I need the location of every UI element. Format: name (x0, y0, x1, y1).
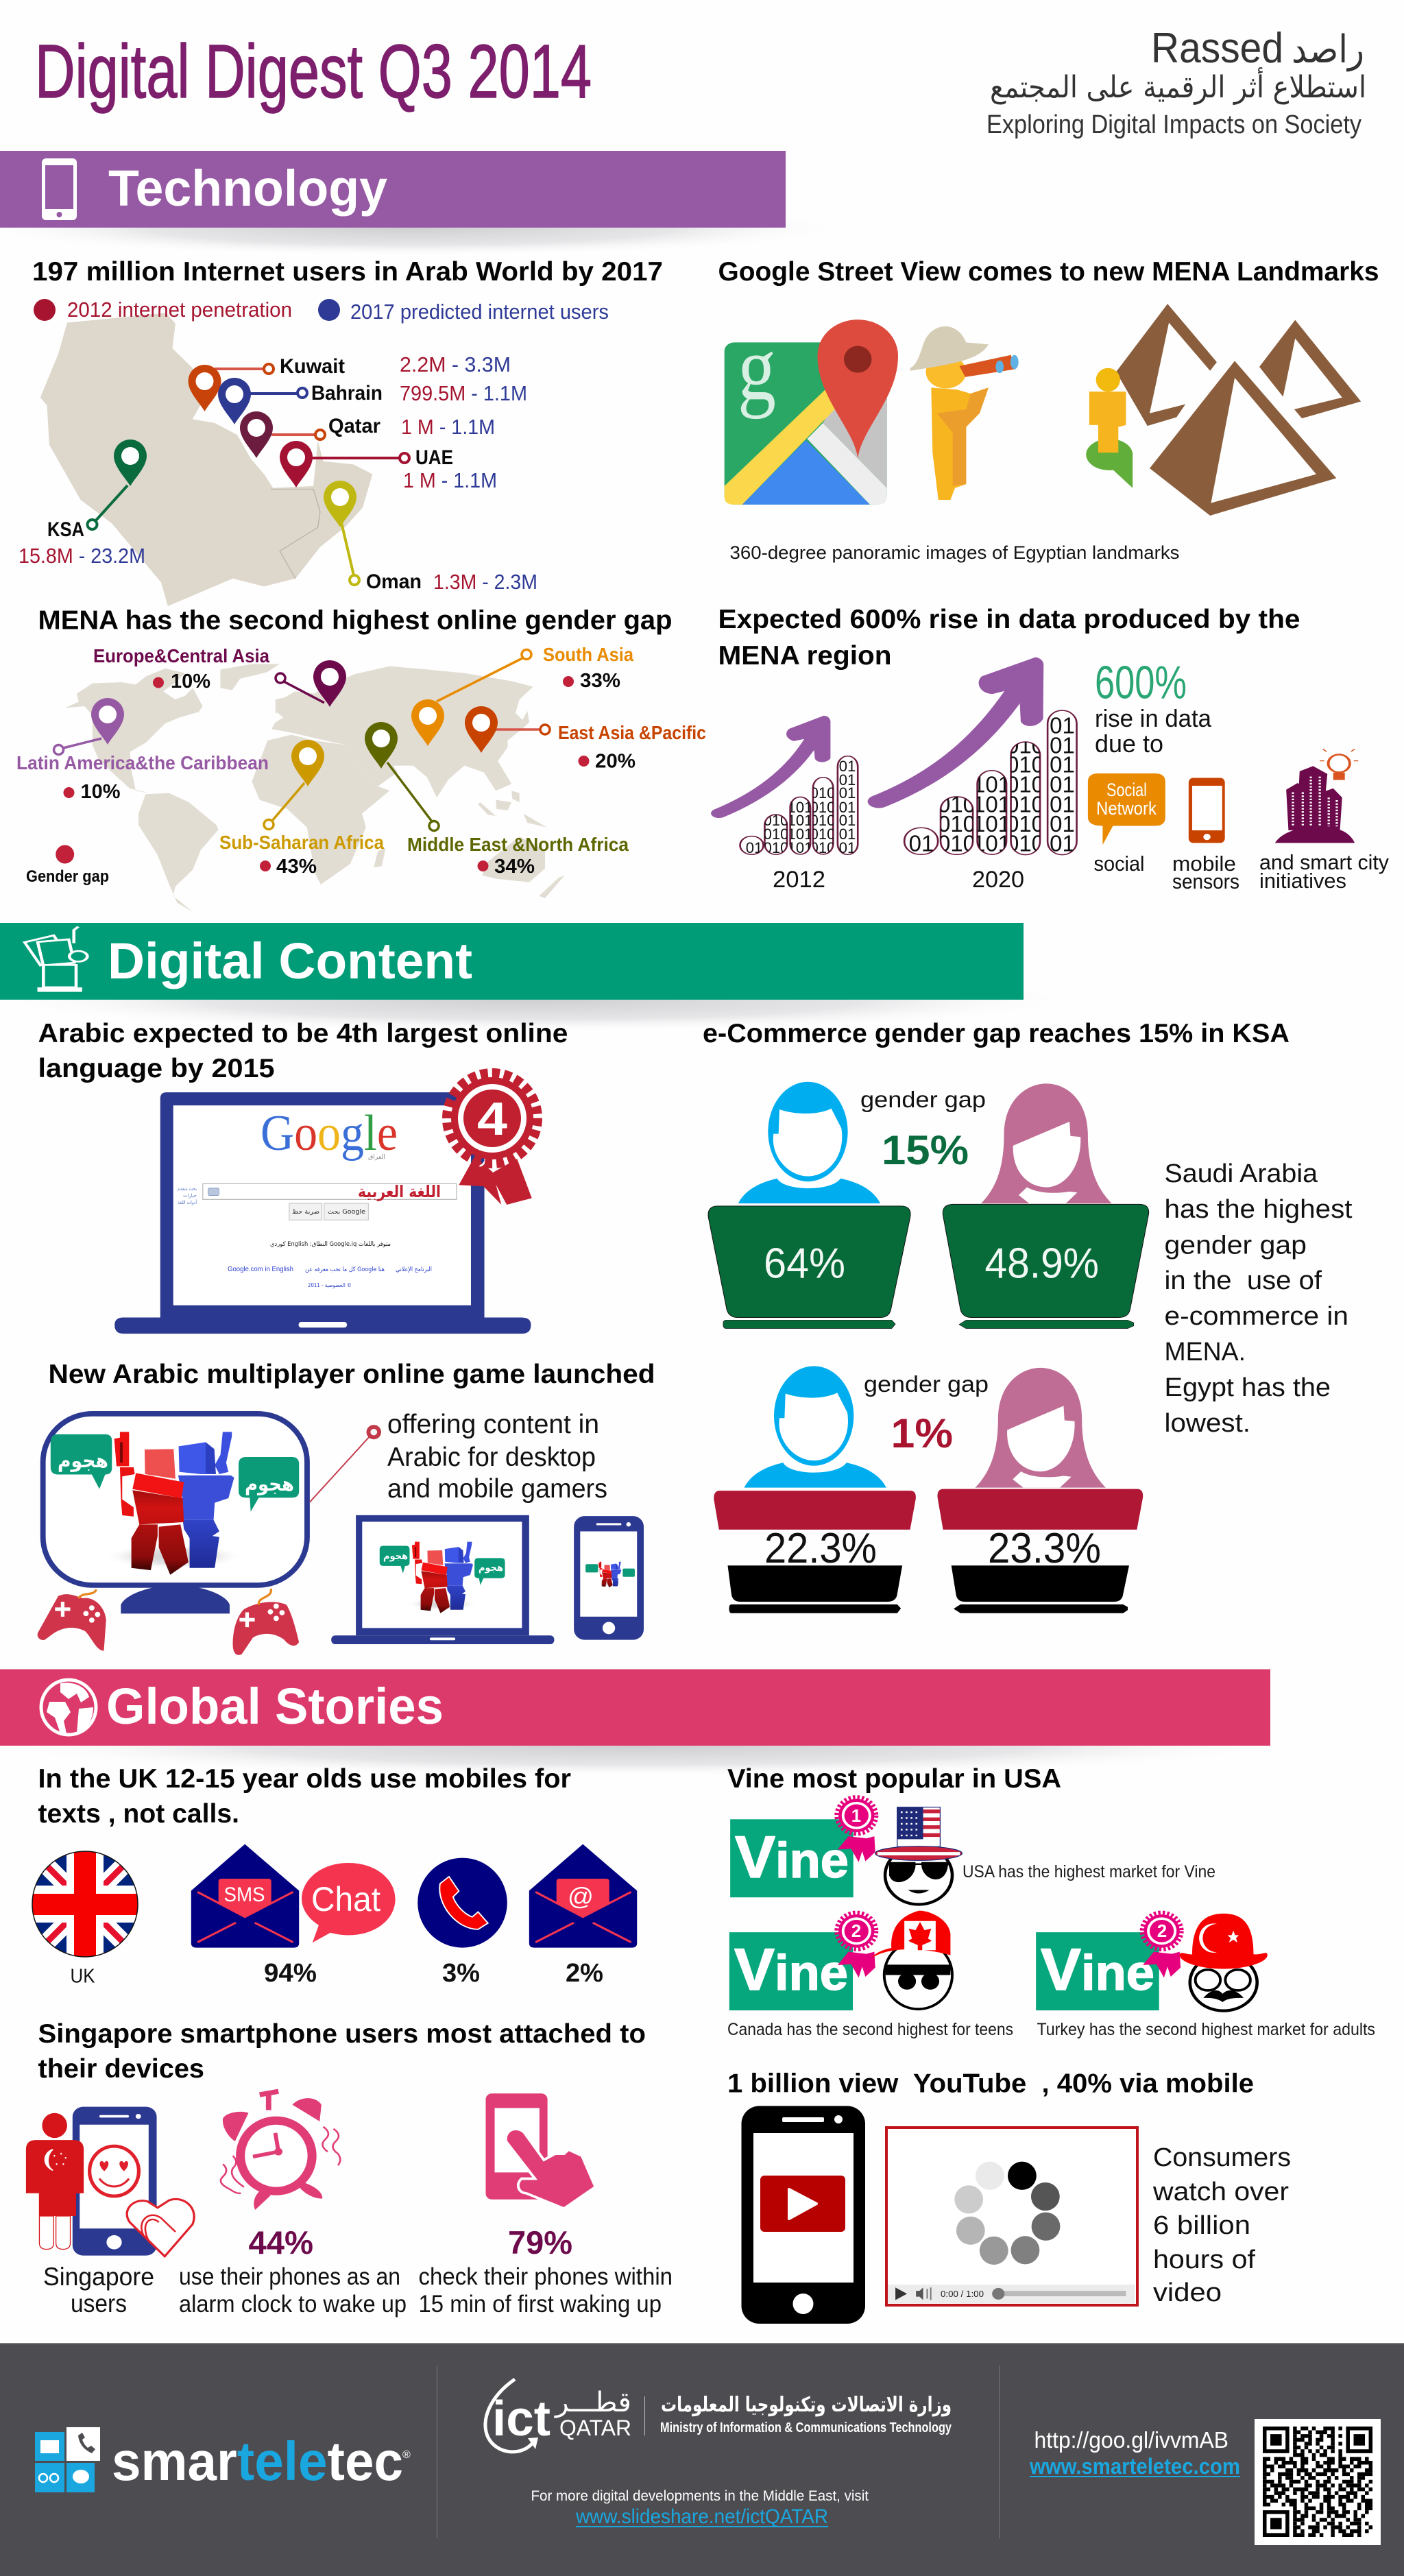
panel: 600% rise in data (718, 605, 1389, 893)
logo: smarteletec: smarteletec (112, 2431, 403, 2492)
icon labels: initiatives (1259, 869, 1346, 893)
badge: rank 4 (448, 1074, 537, 1205)
text: rise in data due to (1095, 704, 1212, 758)
country values: 799.5M - 1.1M (400, 381, 527, 405)
icon: SMS envelope and chat bubble (191, 1844, 396, 1948)
text: first waking stat: check their phones within (418, 2263, 673, 2290)
binary digits: 101 (788, 839, 812, 856)
percentages: 94% (264, 1959, 317, 1988)
link: goo.gl: http://goo.gl/ivvmAB (1034, 2427, 1228, 2453)
binary digits: 010 (1006, 791, 1044, 817)
icon: Singapore user with phone (26, 2107, 194, 2256)
heading: Singapore smartphone users most attached to (38, 2019, 646, 2049)
percentages (264, 1959, 603, 1988)
icon: alarm clock (221, 2091, 340, 2210)
side text: 6 billion (1153, 2211, 1250, 2240)
section banner: Digital Content (0, 923, 1083, 1033)
KSA users on laptops (708, 1082, 1149, 1329)
callout text (387, 1410, 607, 1504)
panel: Singapore smartphone users (26, 2019, 673, 2318)
icon labels (1094, 850, 1389, 893)
Egypt labels: 23.3% (988, 1525, 1101, 1572)
stat: 44%: 44% (248, 2224, 313, 2261)
heading: MENA has the second highest online gender gap (38, 606, 672, 635)
binary digits (746, 713, 1075, 856)
region values (63, 670, 636, 878)
Vine wordmarks: Vine (734, 1937, 848, 2003)
region labels: Latin America&the Caribbean (16, 752, 269, 773)
footer (0, 2343, 1404, 2576)
arrow: 2012 growth (719, 716, 831, 813)
text: first waking stat: 15 min of first waking up (418, 2291, 662, 2318)
heading: their devices (38, 2054, 204, 2084)
small laptop (331, 1515, 554, 1644)
country values (19, 352, 537, 594)
Google page text: الخصوصية - 2011 © (308, 1282, 352, 1288)
binary digits: 01 (839, 839, 856, 856)
text: alarm clock stat: alarm clock to wake up (179, 2291, 407, 2318)
side text: has the highest (1164, 1195, 1353, 1224)
binary digits: 010 (938, 811, 976, 836)
country labels: Bahrain (311, 382, 383, 405)
rank numbers: 2 (851, 1921, 861, 1941)
Google page text: اللغة العربية (358, 1182, 441, 1201)
KSA labels: 64% (764, 1240, 845, 1288)
title: Digital Digest Q3 2014 (35, 29, 592, 114)
heading (38, 1019, 568, 1083)
year labels: 2012 (773, 867, 825, 893)
QR code (1255, 2419, 1381, 2545)
binary digits: 01 (1050, 732, 1075, 758)
binary digits: 010 (810, 784, 835, 802)
Vine wordmarks: Vine (735, 1825, 849, 1890)
Google page text: أدوات اللغة (178, 1199, 197, 1205)
link: slideshare: www.slideshare.net/ictQATAR (575, 2505, 828, 2528)
Vine tiles (729, 1819, 1159, 2010)
year labels (773, 867, 1024, 893)
heading: 1 billion view YouTube , 40% via mobile (727, 2069, 1254, 2098)
binary digits: 01 (839, 812, 856, 829)
rank numbers: 1 (851, 1805, 861, 1826)
icon: SMS envelope and chat bubble: SMS (223, 1883, 265, 1906)
binary digits: 010 (1006, 751, 1044, 778)
heading (38, 2019, 646, 2084)
side text: Egypt has the (1164, 1373, 1331, 1402)
icon: globe (41, 1680, 96, 1735)
callout text: offering content in (387, 1410, 599, 1439)
binary digits: 01 (1050, 831, 1075, 856)
country values: 1 M - 1.1M (401, 415, 495, 439)
text: more developments: For more digital developments in the Middle East, visit (531, 2488, 869, 2504)
small bubble labels: هجوم (479, 1563, 503, 1574)
binary digits: 010 (938, 791, 976, 817)
Vine wordmarks (734, 1825, 1154, 2003)
panel: Internet users in Arab World (19, 257, 663, 606)
Egypt labels: gender gap (864, 1371, 989, 1397)
icon: mobile sensor phone (1189, 778, 1225, 843)
binary digits: 101 (973, 791, 1010, 817)
panel: Arabic 4th largest language (38, 1019, 568, 1334)
rank numbers: 2 (1157, 1921, 1167, 1941)
Egypt labels (764, 1371, 1101, 1572)
heading: e-Commerce gender gap reaches 15% in KSA (703, 1019, 1290, 1048)
region values: 10% (81, 781, 121, 803)
heading: MENA region (718, 641, 891, 671)
video player (886, 2128, 1137, 2305)
text: alarm clock stat (179, 2263, 407, 2318)
percentages: 3% (442, 1959, 480, 1988)
country labels: KSA (47, 518, 84, 541)
side text: e-commerce in (1164, 1302, 1348, 1331)
heading: Vine most popular in USA (727, 1764, 1061, 1794)
callout text: Arabic for desktop (387, 1443, 596, 1472)
binary digits: 01 (909, 831, 934, 856)
logo: ictQATAR: Ministry of Information & Communications Technology (660, 2420, 952, 2435)
side text: watch over (1152, 2178, 1289, 2206)
character: Canada cap (871, 1911, 952, 2009)
video player: 0:00 / 1:00 (941, 2289, 984, 2299)
panel: e-Commerce gender gap (703, 1019, 1353, 1613)
binary digits: 101 (973, 831, 1010, 856)
icon: social network bubble: Network (1096, 798, 1157, 819)
Google page text: كوردي English :النطاق Google.iq متوفر باللغات (270, 1241, 391, 1248)
small bubble labels: هجوم (383, 1551, 408, 1562)
binary digits: 01 (1050, 772, 1075, 797)
Egypt users on laptops (714, 1366, 1143, 1613)
Google page text: بحث Google (328, 1209, 365, 1216)
heading: language by 2015 (38, 1054, 274, 1083)
label: Singapore (43, 2263, 154, 2291)
binary digits: 101 (973, 811, 1010, 836)
label: users (71, 2289, 127, 2318)
text: Turkey: Turkey has the second highest market for adults (1037, 2020, 1375, 2039)
icon: digital media (25, 926, 87, 991)
region labels (16, 644, 706, 855)
side text (1152, 2143, 1291, 2307)
side text (1164, 1159, 1353, 1438)
icon: email envelope: @ (568, 1882, 594, 1910)
country values: 1.3M - 2.3M (433, 570, 537, 594)
binary digits: 101 (788, 826, 812, 843)
icon: pyramids with pegman (1086, 304, 1361, 516)
region values: 34% (494, 856, 535, 878)
icon: UK flag (32, 1851, 138, 1987)
binary bars chart (740, 710, 1077, 855)
logo: Rassed: راصد (1292, 27, 1364, 72)
country labels (47, 355, 453, 593)
text: first waking stat (418, 2263, 673, 2318)
speech bubble labels (58, 1449, 294, 1495)
logo: Rassed: استطلاع أثر الرقمية على المجتمع (990, 67, 1366, 105)
Google page text: العراق (368, 1154, 385, 1161)
region labels: South Asia (543, 644, 633, 665)
binary digits: 01 (839, 826, 856, 843)
KSA labels: 15% (882, 1127, 969, 1173)
rank badges (838, 1798, 1181, 1977)
Vine wordmarks: Vine (1041, 1937, 1154, 2003)
region labels: Europe&Central Asia (93, 645, 269, 666)
section heading: Technology (108, 160, 387, 217)
region values: 43% (276, 856, 317, 878)
header: title and Rassed logo (35, 25, 1366, 139)
icon: smartphone (42, 158, 77, 220)
binary digits: 010 (810, 826, 835, 843)
logo: Rassed (987, 25, 1366, 139)
country values: 15.8M - 23.2M (19, 544, 145, 568)
logo: ictQATAR: QATAR (559, 2416, 631, 2440)
binary digits: 101 (788, 799, 812, 816)
icon: social network bubble (1088, 773, 1165, 845)
small bubble labels (383, 1551, 503, 1574)
map: Arabian peninsula (40, 313, 372, 606)
KSA labels: 48.9% (984, 1240, 1099, 1288)
binary digits: 010 (764, 839, 788, 856)
heading: Expected 600% rise in data produced by the (718, 605, 1300, 634)
region values: 10% (171, 671, 210, 693)
binary digits: 101 (973, 772, 1010, 797)
binary digits: 010 (1006, 831, 1044, 856)
region values: 33% (580, 670, 620, 692)
icon: hand on phone (486, 2093, 595, 2208)
heading: 197 million Internet users in Arab World by 2017 (32, 257, 663, 287)
speech bubble labels: هجوم (58, 1449, 108, 1472)
icon labels: social (1094, 852, 1145, 876)
icon labels: and smart city (1259, 850, 1389, 874)
panel: Google Street View (718, 257, 1379, 563)
icon: smart city (1275, 749, 1358, 843)
region labels: Middle East &North Africa (407, 834, 629, 855)
KSA labels: gender gap (860, 1087, 986, 1112)
binary digits: 01 (1050, 811, 1075, 836)
icon: phone with play button (742, 2106, 865, 2324)
binary digits: 01 (839, 784, 856, 802)
heading: In the UK 12-15 year olds use mobiles for (38, 1764, 571, 1794)
heading: texts , not calls. (38, 1799, 239, 1829)
icon: SMS envelope and chat bubble: Chat (311, 1880, 380, 1918)
icon labels: sensors (1172, 869, 1239, 893)
country labels: Qatar (328, 415, 380, 437)
binary digits: 010 (810, 812, 835, 829)
side text: hours of (1153, 2246, 1255, 2274)
stat: 79%: 79% (508, 2224, 572, 2261)
binary digits: 01 (746, 839, 762, 856)
callout leader (310, 1427, 379, 1502)
logo: ictQATAR: قطـــر (554, 2387, 631, 2418)
character: USA hat (875, 1807, 962, 1905)
section banner: Global Stories (0, 1669, 1296, 1777)
logo: ictQATAR: وزارة الاتصالات وتكنولوجيا المعلومات (661, 2393, 952, 2417)
percentages: 2% (566, 1959, 603, 1988)
Google page text: Google.com in English (228, 1266, 293, 1273)
binary digits: 010 (810, 839, 835, 856)
binary digits: 01 (839, 758, 856, 775)
binary digits: 01 (839, 799, 856, 816)
panel: UK teen mobile use (32, 1764, 637, 1988)
speech bubble labels: هجوم (245, 1473, 294, 1495)
binary digits: 01 (839, 771, 856, 789)
logo: ictQATAR (485, 2379, 952, 2452)
icon: UK flag: UK (70, 1965, 95, 1987)
Egypt labels: 1% (891, 1410, 953, 1456)
text: alarm clock stat: use their phones as an (179, 2263, 400, 2290)
small phone (574, 1516, 644, 1640)
link: smarteletec: www.smarteletec.com (1029, 2454, 1240, 2479)
text: rise in data due to: rise in data (1095, 704, 1212, 732)
game controllers (38, 1589, 299, 1655)
side text: video (1153, 2278, 1222, 2307)
binary digits: 01 (1050, 791, 1075, 817)
rank numbers (851, 1805, 1167, 1941)
side text: Saudi Arabia (1164, 1159, 1318, 1188)
icon: Google Maps (725, 320, 898, 505)
binary digits: 010 (1006, 732, 1044, 758)
binary digits: 010 (764, 826, 788, 843)
caption: 360-degree panoramic images of Egyptian landmarks (729, 542, 1179, 563)
section heading: Digital Content (108, 932, 472, 989)
Google page text: كل ما تحب معرفه عن Google هنا (305, 1266, 385, 1273)
region labels: East Asia &Pacific (558, 722, 706, 743)
binary digits: 010 (938, 831, 976, 856)
map pins and leader lines (88, 364, 409, 585)
Google page text (178, 1105, 441, 1288)
region labels: Sub-Saharan Africa (219, 832, 384, 853)
binary digits: 010 (1006, 772, 1044, 797)
text: rise in data due to: due to (1095, 730, 1163, 758)
binary digits: 01 (1050, 713, 1075, 738)
icon: social network bubble: Social (1106, 780, 1147, 800)
legend (34, 298, 609, 324)
Google page text: ضربة حظ (292, 1209, 319, 1216)
stat: 600%: 600% (1095, 657, 1187, 709)
laptop (114, 1092, 531, 1334)
side text: gender gap (1164, 1231, 1307, 1260)
logo: ictQATAR: ict (492, 2392, 550, 2446)
panel: YouTube views (727, 2069, 1291, 2324)
icon: explorer figure with binoculars (910, 326, 1019, 500)
character: Turkey hat (1180, 1914, 1268, 2011)
text: USA: USA has the highest market for Vine (963, 1862, 1215, 1881)
Google page text: Google (261, 1105, 398, 1161)
logo: Rassed: Exploring Digital Impacts on Society (987, 110, 1361, 139)
binary digits: 101 (788, 812, 812, 829)
country labels: Kuwait (280, 355, 345, 378)
Google page text: خيارات (183, 1193, 197, 1199)
region values: 20% (595, 750, 636, 772)
Egypt labels: 22.3% (764, 1525, 877, 1572)
country labels: Oman (366, 570, 422, 593)
icon labels: mobile (1172, 852, 1236, 876)
text: Canada: Canada has the second highest for teens (727, 2020, 1013, 2039)
binary digits: 010 (764, 812, 788, 829)
side text: lowest. (1164, 1409, 1250, 1438)
legend: gender gap (26, 845, 109, 886)
country values: 1 M - 1.1M (403, 468, 497, 492)
panel: MENA online gender gap (16, 606, 706, 912)
country labels: UAE (415, 446, 453, 469)
side text: MENA. (1164, 1338, 1246, 1367)
KSA labels (764, 1087, 1099, 1288)
side text: in the use of (1164, 1266, 1322, 1295)
section heading: Global Stories (106, 1678, 444, 1735)
year labels: 2020 (972, 867, 1024, 893)
binary digits: 01 (1050, 751, 1075, 778)
icon letter g: g (738, 317, 776, 420)
callout text: and mobile gamers (387, 1474, 607, 1504)
section banner: Technology (0, 151, 850, 256)
binary digits: 010 (1006, 811, 1044, 836)
icon: phone call (417, 1858, 507, 1948)
heading: Google Street View comes to new MENA Landmarks (718, 257, 1379, 287)
pins and leader lines (53, 650, 550, 831)
side text: Consumers (1153, 2143, 1291, 2172)
heading: Arabic expected to be 4th largest online (38, 1019, 568, 1048)
heading (718, 605, 1300, 671)
Google page text: البرنامج الإعلاني (396, 1266, 432, 1273)
label (43, 2263, 154, 2318)
country values: 2.2M - 3.3M (400, 352, 511, 376)
logo: smarteletec: ® (402, 2449, 411, 2461)
panel: Arabic multiplayer game (38, 1360, 655, 1655)
legend: 2012 internet penetration (67, 298, 292, 322)
heading (38, 1764, 571, 1829)
logo: Rassed: Rassed (1151, 25, 1283, 72)
map: world (65, 664, 565, 912)
legend: gender gap: Gender gap (26, 867, 109, 886)
legend: 2017 predicted internet users (350, 300, 609, 324)
monitor with game characters (43, 1414, 307, 1613)
binary digits: 010 (810, 799, 835, 816)
icon: email envelope (529, 1844, 637, 1948)
heading: New Arabic multiplayer online game launched (48, 1360, 655, 1389)
arrow: 2020 growth (879, 657, 1043, 802)
badge: rank 4: 4 (477, 1093, 507, 1145)
panel: Vine popularity (727, 1764, 1375, 2039)
Google page text: بحث متقدم (178, 1186, 197, 1192)
